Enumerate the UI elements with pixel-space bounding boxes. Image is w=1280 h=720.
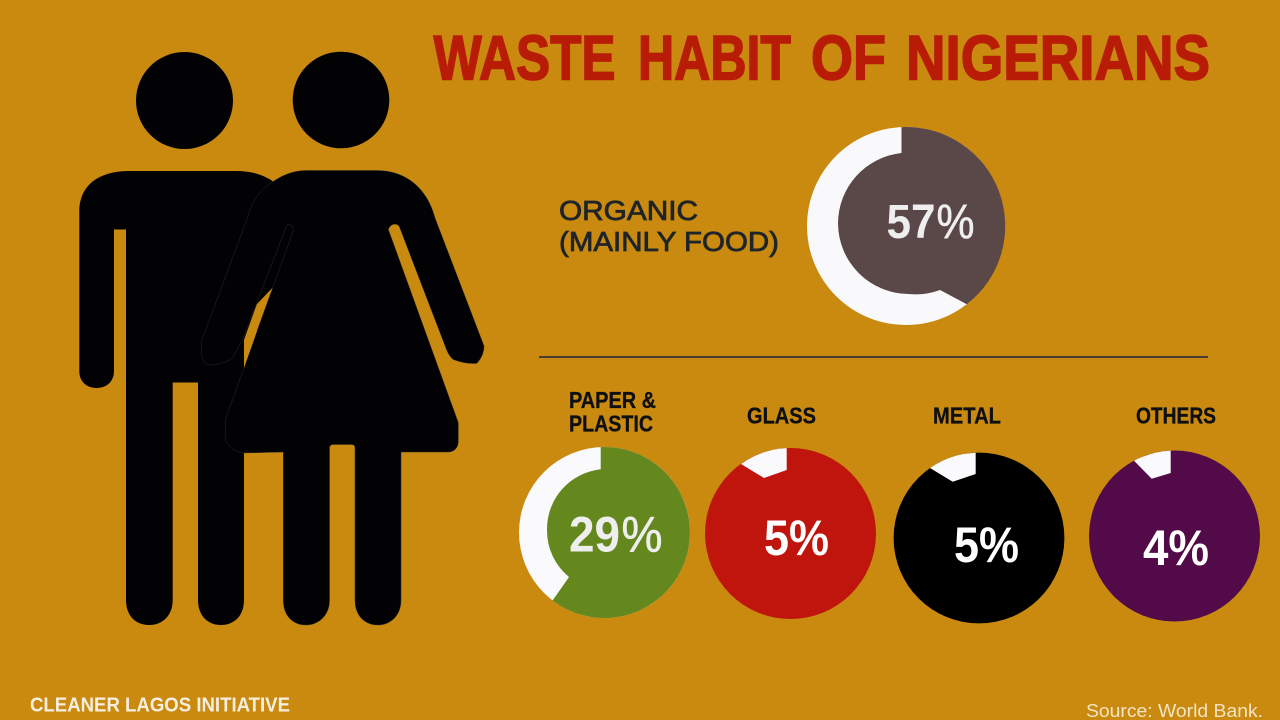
title: NIGERIANS — [906, 24, 1210, 94]
chart: paper and plastic 29% donut: 29 — [569, 506, 620, 562]
chart: glass 5% pie — [705, 448, 876, 619]
title — [434, 24, 1210, 94]
label: paper and plastic — [569, 387, 656, 436]
label: metal: METAL — [933, 402, 1001, 428]
label: organic — [559, 195, 779, 257]
label: paper and plastic: PLASTIC — [569, 410, 653, 436]
label: glass: GLASS — [747, 402, 816, 428]
chart: organic 57% donut: 57 — [886, 196, 936, 249]
chart: glass 5% pie: 5% — [764, 510, 829, 566]
title: WASTE — [434, 24, 616, 94]
chart: others 4% pie — [1089, 450, 1260, 622]
chart: paper and plastic 29% donut — [519, 447, 690, 618]
chart: others 4% pie: 4% — [1143, 520, 1209, 576]
label: organic: (MAINLY FOOD) — [559, 226, 779, 257]
label: others: OTHERS — [1136, 402, 1216, 428]
title: HABIT — [638, 24, 791, 94]
icon: man and woman couple — [79, 52, 484, 625]
icon: gap between arm and skirt — [244, 304, 257, 368]
chart: metal 5% pie — [894, 453, 1064, 623]
icon: woman — [202, 52, 484, 625]
icon: man — [79, 52, 297, 625]
label: paper and plastic: PAPER & — [569, 387, 656, 413]
chart: paper and plastic 29% donut: % — [622, 506, 662, 562]
chart: metal 5% pie: 5% — [954, 517, 1019, 573]
label: organic: ORGANIC — [559, 195, 698, 226]
footer: organisation: CLEANER LAGOS INITIATIVE — [30, 694, 290, 716]
chart: organic 57% donut: % — [936, 196, 974, 249]
chart: organic 57% donut — [807, 127, 1005, 325]
title: OF — [811, 24, 886, 94]
